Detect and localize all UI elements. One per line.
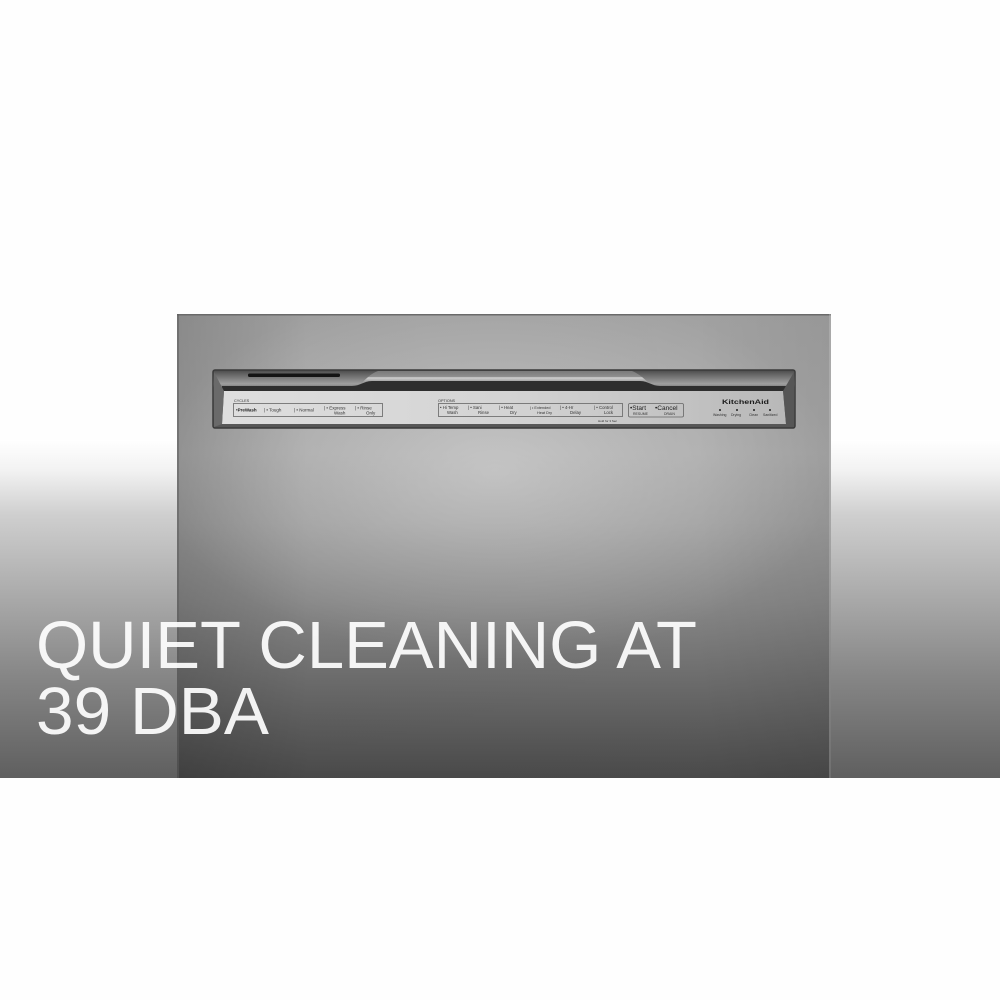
status lights: Washing [713,413,727,417]
start and cancel buttons: •Cancel [655,405,678,412]
option buttons: | • Control [594,405,613,410]
cycle buttons: | • Rinse [355,406,372,410]
cycle buttons: | • Tough [264,408,282,412]
speaker slot [248,374,340,377]
start and cancel buttons [628,404,684,417]
handle grip [358,371,654,386]
cycle buttons [234,399,382,416]
status lights: Clean [749,413,758,417]
status lights [713,409,777,417]
option buttons [438,399,622,423]
option buttons: • Hi Temp [440,405,459,410]
option buttons: Heat Dry [537,411,552,415]
start and cancel buttons: DRAIN [664,412,675,416]
title [36,608,697,749]
cycle buttons: Wash [334,410,346,416]
control plate [222,391,786,424]
cycle buttons: | • Express [324,406,346,410]
dishwasher door [177,314,831,778]
brand logo: KitchenAid [722,399,769,406]
option buttons: Delay [570,410,582,415]
option buttons: Dry [510,410,518,415]
shadow band under handle [222,381,786,391]
option buttons: Rinse [478,410,490,415]
title: QUIET CLEANING AT [36,608,697,683]
title: 39 DBA [36,674,269,749]
option buttons: | • Sani [468,405,482,410]
status lights: Sanitized [763,413,777,417]
cycle buttons: •PreWash [236,408,257,412]
start and cancel buttons: RESUME [633,412,649,416]
option buttons: Wash [447,410,458,415]
option buttons: OPTIONS [438,399,456,403]
control panel recess [213,370,795,428]
option buttons: Lock [604,410,614,415]
cycle buttons: Only [366,410,376,416]
option buttons: Hold for 3 Sec [598,419,618,423]
option buttons: | • Extended [530,406,550,410]
start and cancel buttons: •Start [630,405,646,412]
option buttons: | • 4-Hr [560,405,574,410]
status lights: Drying [731,413,741,417]
cycle buttons: CYCLES [234,399,250,403]
cycle buttons: | • Normal [294,408,314,412]
option buttons: | • Heat [499,405,514,410]
